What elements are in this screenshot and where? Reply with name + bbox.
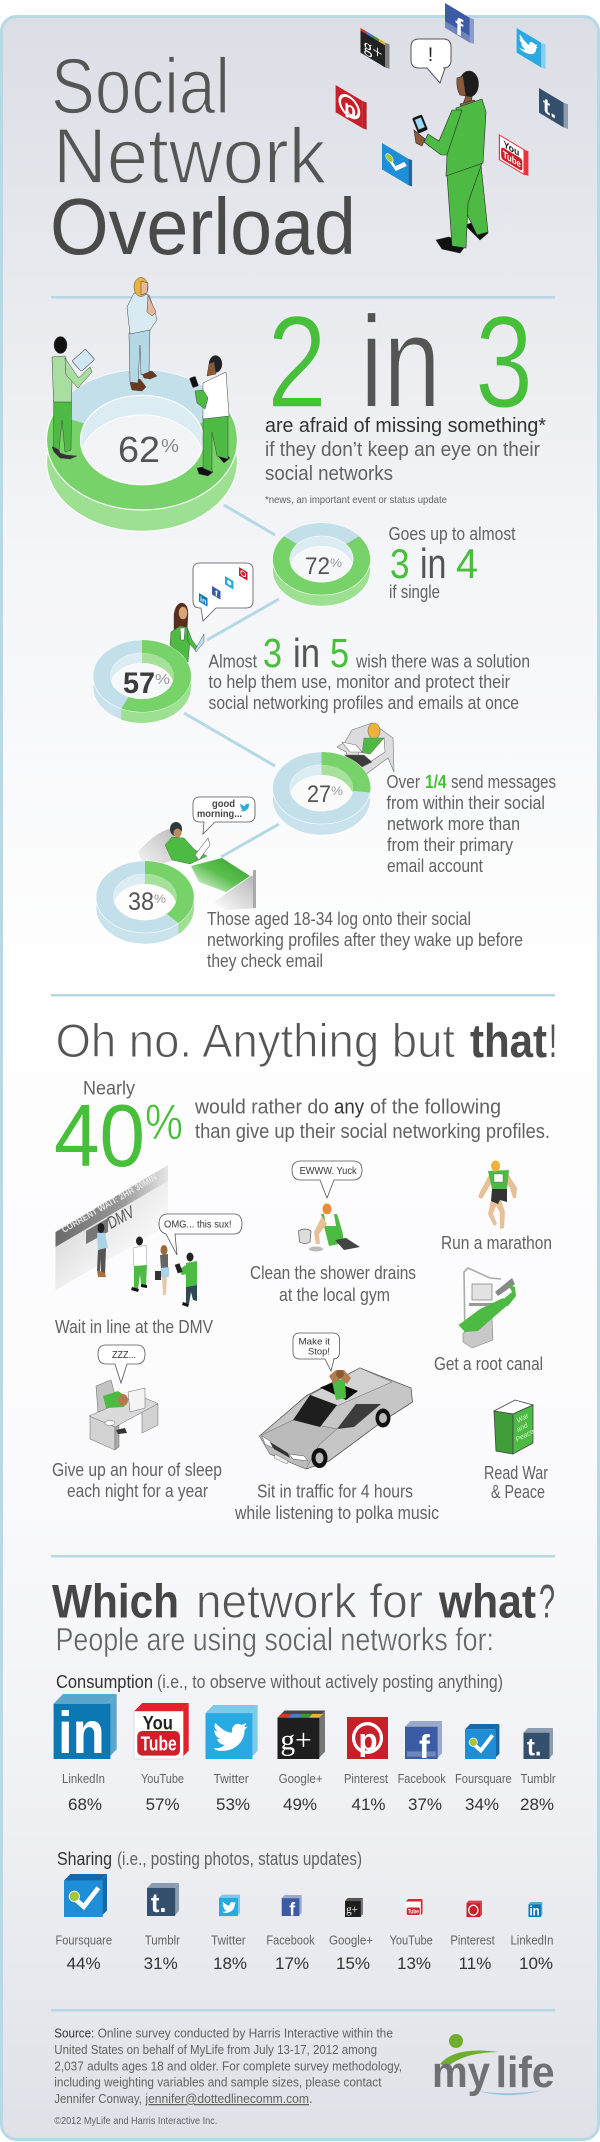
labels and percentages: Pinterest xyxy=(344,1771,388,1786)
labels and percentages: 34% xyxy=(465,1795,499,1814)
text: would rather: of the following xyxy=(370,1096,501,1118)
icon: YouTube: You xyxy=(143,1712,173,1733)
ring value: 57 xyxy=(123,667,155,700)
text: would rather: than give up their social networking profiles. xyxy=(195,1121,550,1143)
icon: Facebook xyxy=(282,1895,302,1919)
text block: source: 2,037 adults ages 18 and older. For complete survey methodology, xyxy=(54,2059,402,2074)
icon: Facebook isometric xyxy=(445,2,474,50)
labels and percentages: Foursquare xyxy=(455,1771,512,1786)
labels and percentages: 68% xyxy=(68,1795,102,1814)
speech bubble: ZZZ xyxy=(98,1345,145,1383)
figure: woman with tablet xyxy=(52,336,95,459)
icon: YouTube: Tube xyxy=(141,1733,177,1756)
wheels xyxy=(312,1448,328,1468)
icon: Pinterest xyxy=(347,1717,388,1759)
icon: Pinterest xyxy=(466,1901,482,1917)
car body xyxy=(260,1368,412,1469)
text: 3 in 4 if single: 4 xyxy=(456,540,478,587)
ring value: 72 xyxy=(305,553,330,580)
caption: traffic xyxy=(234,1482,439,1523)
stat: nearly 40%: % xyxy=(145,1094,183,1150)
speech bubble: exclamation xyxy=(411,39,451,83)
illustration: War and Peace book xyxy=(494,1400,536,1454)
text block: source: United States on behalf of MyLife from July 13-17, 2012 among xyxy=(54,2042,377,2057)
text: 3 in 5 solution: 5 xyxy=(330,630,349,676)
text block: source xyxy=(54,2026,402,2106)
illustration: dentist chair xyxy=(458,1268,516,1348)
labels and percentages: YouTube xyxy=(141,1771,184,1786)
text: 3 in 4 if single: 3 xyxy=(390,540,410,587)
text: 3 in 5 solution: in xyxy=(293,630,320,676)
divider xyxy=(51,2009,555,2012)
caption: traffic: Sit in traffic for 4 hours xyxy=(257,1482,413,1502)
figure: man in armchair with laptop xyxy=(337,723,394,775)
labels and percentages: 17% xyxy=(275,1954,309,1973)
speech bubble: make it stop: Make it xyxy=(298,1337,330,1348)
text: 3 in 5 solution: wish there was a solution xyxy=(355,652,530,672)
caption: book: & Peace xyxy=(491,1482,545,1502)
woman with bag xyxy=(155,1245,169,1295)
icon: Tumblr isometric: t. xyxy=(543,92,556,124)
title xyxy=(50,41,356,271)
labels and percentages: Pinterest xyxy=(450,1933,495,1948)
person with phone xyxy=(131,1236,147,1292)
text block: source: jennifer@dottedlinecomm.com xyxy=(144,2091,309,2106)
icon: Google+: g+ xyxy=(280,1723,312,1756)
mini icon: Twitter xyxy=(225,576,234,590)
ring value: 38 xyxy=(128,888,154,916)
labels and percentages: LinkedIn xyxy=(510,1933,553,1948)
subheading: sharing xyxy=(57,1849,362,1869)
figure: man in bed with laptop xyxy=(138,822,256,910)
text: 3 in 4 if single xyxy=(388,524,516,602)
icon: Google+: g+ xyxy=(346,1904,358,1916)
icon: Tumblr: t. xyxy=(151,1888,166,1918)
icon: Pinterest isometric xyxy=(336,84,367,131)
labels and percentages: Twitter xyxy=(211,1933,246,1948)
labels and percentages: 10% xyxy=(519,1954,553,1973)
text: 3 in 5 solution: Almost xyxy=(208,652,257,672)
text: would rather: would rather do xyxy=(194,1096,329,1118)
section: title header xyxy=(50,2,568,271)
icon: Google+ xyxy=(278,1710,325,1759)
caption: sleep: Give up an hour of sleep xyxy=(52,1460,222,1480)
chart: 72% ring xyxy=(272,523,370,606)
illustration: sleeping at desk xyxy=(89,1380,158,1450)
ring value: % xyxy=(331,784,343,798)
icon: Google+ isometric: g+ xyxy=(363,35,383,66)
DMV wall xyxy=(56,1181,168,1290)
heading: which network for what xyxy=(52,1574,555,1628)
labels and percentages: Google+ xyxy=(279,1771,323,1786)
chart: 57% ring xyxy=(93,640,191,723)
man with tablet xyxy=(175,1252,197,1307)
icon: Google+ xyxy=(345,1898,363,1917)
labels and percentages: Foursquare xyxy=(56,1933,112,1948)
ring value xyxy=(118,429,179,470)
text: 3 in 4 if single: in xyxy=(420,540,446,587)
speech bubble: exclamation: ! xyxy=(428,45,433,66)
icon: Tumblr isometric xyxy=(539,87,568,131)
icon: Pinterest: p xyxy=(358,1721,378,1758)
icon: Foursquare isometric xyxy=(382,142,412,187)
speech bubble: EWWW xyxy=(292,1161,362,1198)
labels and percentages: 31% xyxy=(144,1954,178,1973)
big stat: 2 in 3: 3 xyxy=(475,288,533,435)
connector lines between rings xyxy=(184,505,279,857)
headlights and grille xyxy=(262,1436,273,1448)
labels and percentages: 11% xyxy=(459,1954,491,1973)
text: 3 in 4 if single: Goes up to almost xyxy=(388,524,516,544)
icon: LinkedIn: in xyxy=(58,1700,105,1766)
illustration: War and Peace book: and xyxy=(516,1422,530,1434)
text block: source: Source: xyxy=(54,2026,94,2040)
text: 3 in 5 solution: to help them use, monitor and protect their xyxy=(208,672,510,692)
text: afraid of missing something xyxy=(265,415,546,506)
labels and percentages xyxy=(56,1933,553,1973)
speech bubble: good morning xyxy=(193,797,255,834)
labels and percentages: Facebook xyxy=(266,1933,315,1948)
caption: book: Read War xyxy=(484,1463,548,1483)
ring value: % xyxy=(154,892,166,906)
speech bubble: ZZZ: ZZZ... xyxy=(112,1349,136,1361)
icon: LinkedIn: in xyxy=(529,1903,540,1919)
sunroof xyxy=(320,1382,358,1400)
icon: Twitter xyxy=(219,1895,240,1916)
icon: Tumblr xyxy=(524,1728,553,1761)
icon: YouTube xyxy=(406,1899,422,1916)
big stat: 2 in 3 xyxy=(267,288,533,435)
text: afraid of missing something: *news, an important event or status update xyxy=(265,494,447,506)
text block: source: . xyxy=(309,2091,313,2106)
illustration: car in traffic xyxy=(260,1368,412,1469)
logo: mylife: my xyxy=(432,2048,490,2097)
divider xyxy=(51,296,555,298)
heading: Oh no: Oh no. Anything but xyxy=(56,1014,455,1067)
subheading: sharing: (i.e., posting photos, status updates) xyxy=(117,1849,362,1869)
mini icon: Twitter bird xyxy=(240,804,250,811)
labels and percentages xyxy=(62,1771,556,1814)
icon: Tumblr xyxy=(147,1883,179,1918)
icon: Tumblr: t. xyxy=(527,1734,541,1761)
caption: book xyxy=(484,1463,548,1502)
labels and percentages: 37% xyxy=(408,1795,442,1814)
icon: Facebook: f xyxy=(289,1899,296,1919)
text: over 1/4 send messages: 1/4 xyxy=(425,772,446,792)
heading: which network for what: network for xyxy=(196,1574,423,1628)
labels and percentages: Facebook xyxy=(398,1771,446,1786)
stat: nearly 40%: 40 xyxy=(54,1086,145,1185)
text: over 1/4 send messages: network more than xyxy=(387,814,520,834)
text: 3 in 5 solution xyxy=(208,630,530,713)
heading: which network for what: Which xyxy=(52,1574,179,1628)
text block: source: Online survey conducted by Harris Interactive within the xyxy=(98,2026,393,2040)
text: aged 18-34 xyxy=(207,909,523,971)
labels and percentages: Twitter xyxy=(214,1771,249,1786)
caption: sleep xyxy=(52,1460,222,1501)
speech bubble: make it stop xyxy=(293,1333,340,1371)
heading: Oh no: ! xyxy=(549,1014,557,1067)
illustration: DMV line xyxy=(56,1165,197,1307)
speech bubble: EWWW: EWWW. Yuck xyxy=(300,1166,358,1177)
text: would rather xyxy=(194,1096,550,1143)
title: Overload xyxy=(50,182,356,271)
big stat: 2 in 3: in xyxy=(360,288,441,435)
speech bubble: social icons xyxy=(193,563,253,621)
icon: Facebook isometric: f xyxy=(455,11,463,43)
speech bubble: good morning: good xyxy=(212,798,235,810)
person at window xyxy=(97,1223,108,1277)
text: over 1/4 send messages: email account xyxy=(387,856,483,876)
section: sharing xyxy=(56,1849,553,1973)
text: afraid of missing something: are afraid of missing something* xyxy=(265,415,546,437)
text: aged 18-34: Those aged 18-34 log onto their social xyxy=(207,909,471,929)
text: 3 in 5 solution: social networking profiles and emails at once xyxy=(208,693,519,713)
DMV sign: DMV xyxy=(104,1202,139,1233)
driver standing in sunroof xyxy=(329,1370,351,1400)
icon: Facebook xyxy=(405,1721,442,1765)
divider xyxy=(51,1555,555,1558)
ring value: % xyxy=(161,436,179,456)
caption: traffic: while listening to polka music xyxy=(234,1503,439,1523)
icon: Pinterest isometric: p xyxy=(344,95,356,123)
mini icon: LinkedIn: in xyxy=(200,594,207,607)
icon: YouTube isometric: You xyxy=(503,139,519,159)
caption: sleep: each night for a year xyxy=(67,1481,208,1501)
labels and percentages: Tumblr xyxy=(145,1933,181,1948)
figure: woman in green suit with tablet xyxy=(170,603,204,662)
labels and percentages: Tumblr xyxy=(520,1771,556,1786)
big stat: 2 in 3: 2 xyxy=(267,288,327,435)
heading: which network for what: ? xyxy=(539,1574,555,1628)
chart: 62% ring xyxy=(46,370,238,531)
illustration: cleaning drains xyxy=(298,1204,360,1252)
subheading: sharing: Sharing xyxy=(57,1849,112,1869)
speech bubble: good morning: morning... xyxy=(197,808,242,820)
text: over 1/4 send messages: Over xyxy=(386,772,420,792)
logo: mylife: life xyxy=(496,2048,555,2097)
ring value: 27 xyxy=(307,781,331,808)
chart: 38% ring xyxy=(96,861,194,944)
text: would rather: any xyxy=(334,1096,364,1118)
labels and percentages: 15% xyxy=(336,1954,370,1973)
labels and percentages: 53% xyxy=(216,1795,250,1814)
text: over 1/4 send messages: from within their social xyxy=(386,793,545,813)
icon: Twitter xyxy=(206,1705,258,1759)
title: Social xyxy=(51,41,230,130)
section: consumption xyxy=(54,1672,556,1814)
text block: source: Jennifer Conway, xyxy=(54,2091,142,2106)
chart: 27% ring xyxy=(272,752,370,835)
figure: blond man standing xyxy=(127,278,157,391)
text: over 1/4 send messages xyxy=(386,772,556,876)
logo: mylife xyxy=(432,2034,555,2097)
icon: Google+ isometric xyxy=(360,27,390,70)
ring value: % xyxy=(330,556,342,570)
stat: nearly 40%: Nearly xyxy=(83,1078,135,1100)
subheading: consumption: (i.e., to observe without actively posting anything) xyxy=(157,1672,503,1692)
icon: YouTube xyxy=(134,1703,189,1759)
caption: root canal: Get a root canal xyxy=(434,1354,543,1374)
heading: which network for what: what xyxy=(438,1574,536,1628)
text: over 1/4 send messages: from their primary xyxy=(387,835,513,855)
labels and percentages: 44% xyxy=(67,1954,101,1973)
speech bubble: OMG: OMG... this sux! xyxy=(164,1220,232,1230)
ring value: % xyxy=(155,671,170,688)
wait-time banner: CURRENT WAIT: 2HR 30MIN xyxy=(60,1172,159,1235)
windows xyxy=(293,1395,337,1427)
text: afraid of missing something: social networks xyxy=(265,463,393,485)
icon: Facebook: f xyxy=(419,1727,431,1765)
speech bubble: make it stop: Stop! xyxy=(308,1347,330,1358)
subheading: People are using social networks for: xyxy=(56,1622,494,1658)
caption: shower drains: at the local gym xyxy=(279,1285,390,1305)
icon: Foursquare xyxy=(465,1724,499,1759)
caption: shower drains: Clean the shower drains xyxy=(250,1263,416,1283)
icon: YouTube isometric: Tube xyxy=(503,149,521,171)
figure: man with phone in white shirt xyxy=(189,356,230,476)
labels and percentages: Google+ xyxy=(329,1933,373,1948)
text block: source: including weighting variables and sample sizes, please contact xyxy=(54,2075,382,2090)
illustration: runner xyxy=(478,1160,517,1229)
icon: YouTube isometric xyxy=(499,134,528,177)
caption: shower drains xyxy=(250,1263,416,1305)
text: 3 in 4 if single: if single xyxy=(389,582,440,602)
divider xyxy=(51,994,555,996)
text: afraid of missing something: if they don’t keep an eye on their xyxy=(265,439,540,461)
labels and percentages: LinkedIn xyxy=(62,1771,105,1786)
subheading: consumption: Consumption xyxy=(56,1672,153,1692)
caption: DMV: Wait in line at the DMV xyxy=(55,1317,213,1337)
labels and percentages: 41% xyxy=(351,1795,386,1814)
labels and percentages: 57% xyxy=(146,1795,180,1814)
ring value: 62 xyxy=(118,429,160,470)
labels and percentages: 28% xyxy=(520,1795,554,1814)
speech bubble: OMG xyxy=(159,1214,242,1255)
text: 3 in 5 solution: 3 xyxy=(263,630,282,676)
labels and percentages: 13% xyxy=(397,1954,431,1973)
illustration: War and Peace book: War xyxy=(516,1412,531,1425)
text: aged 18-34: they check email xyxy=(207,951,323,971)
labels and percentages: 49% xyxy=(283,1795,317,1814)
DMV sign xyxy=(86,1202,139,1244)
icon: YouTube: Tube xyxy=(408,1908,419,1915)
figure: man in green suit with phone xyxy=(412,71,488,253)
illustration: War and Peace book: Peace xyxy=(515,1428,536,1444)
mini icon: Facebook: f xyxy=(215,588,218,599)
mini icon: Pinterest xyxy=(239,567,248,581)
labels and percentages: 18% xyxy=(213,1954,247,1973)
heading: Oh no: that xyxy=(470,1014,547,1067)
labels and percentages: YouTube xyxy=(390,1933,433,1948)
text: aged 18-34: networking profiles after they wake up before xyxy=(207,930,523,950)
caption: marathon: Run a marathon xyxy=(441,1233,552,1253)
copyright: ©2012 MyLife and Harris Interactive Inc. xyxy=(54,2116,217,2127)
icon: Foursquare xyxy=(64,1874,107,1917)
icon: Twitter isometric xyxy=(517,27,546,70)
text: over 1/4 send messages: send messages xyxy=(451,772,556,792)
title: Network xyxy=(53,111,326,200)
